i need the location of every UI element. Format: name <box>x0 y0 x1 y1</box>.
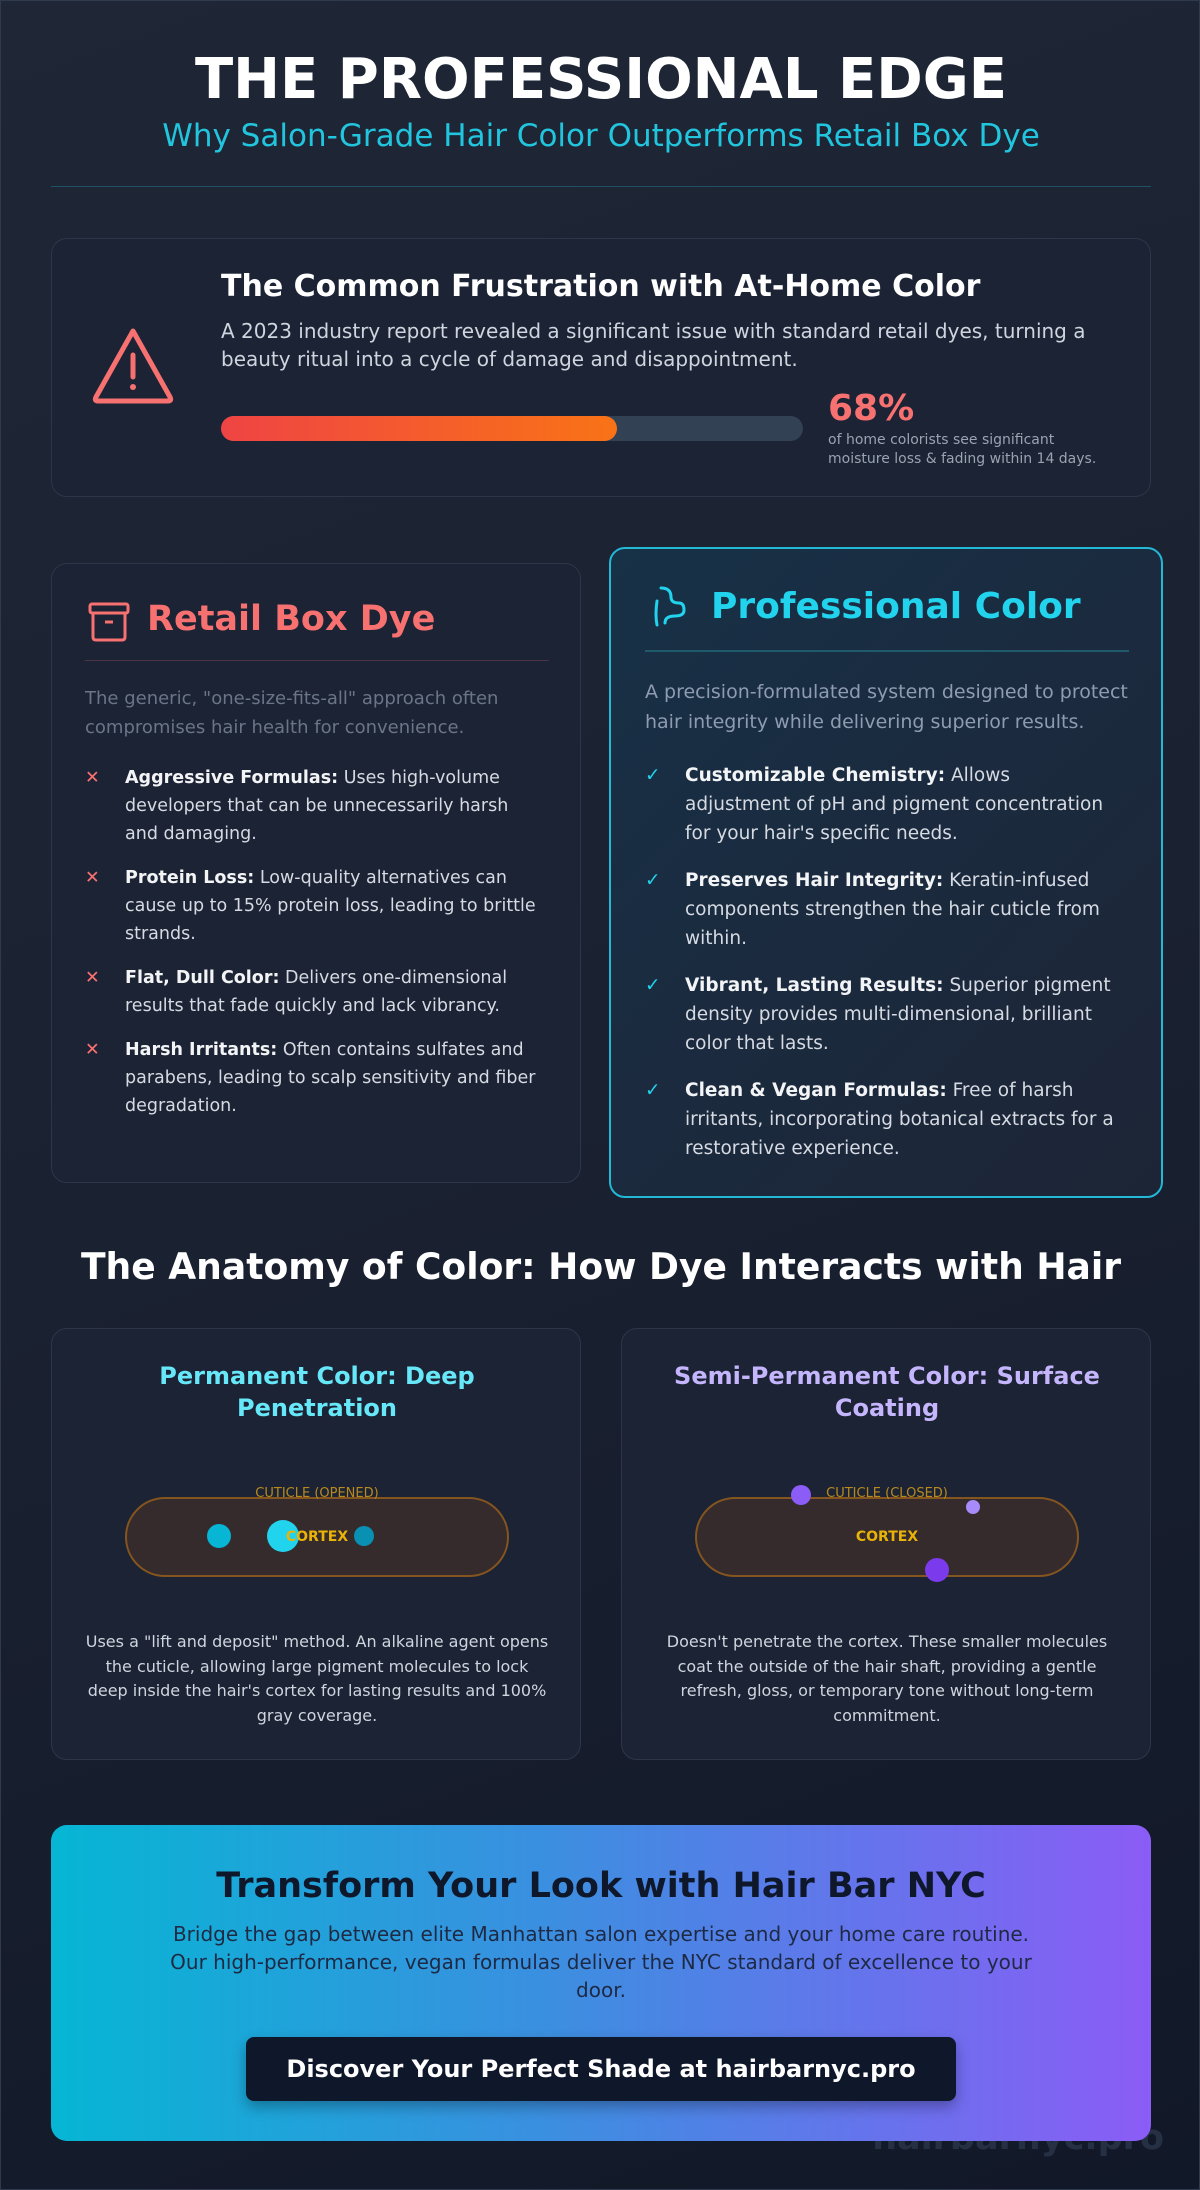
heading: anatomy: The Anatomy of Color: How Dye Interacts with Hair <box>81 1246 1121 1288</box>
item: customizable chemistry: adjustment of pH and pigment concentration for your hair's specific needs. <box>685 794 1103 844</box>
heading: Coating <box>835 1394 939 1422</box>
item: flat dull color: ✕ <box>85 968 100 988</box>
item: clean vegan formulas: Clean & Vegan Formulas: Free of harsh irritants, incorporating botanical extracts for a restorative experience. <box>685 1080 1114 1159</box>
bar chart: 68% <box>221 416 803 441</box>
body text: the cuticle, allowing large pigment molecules to lock <box>106 1656 528 1676</box>
heading: Professional Color <box>711 586 1081 627</box>
item: flat dull color: Flat, Dull Color: Delivers one-dimensional results that fade quickly and lack vibrancy. <box>125 968 507 1016</box>
heading: Semi-Permanent Color: Surface <box>674 1362 1100 1390</box>
body text: Uses a "lift and deposit" method. An alkaline agent opens <box>86 1632 548 1651</box>
body text: Doesn't penetrate the cortex. These smaller molecules <box>667 1632 1107 1651</box>
body text: A 2023 industry report revealed a significant issue with standard retail dyes, turning a beauty ritual into a cycle of damage and disappointment. <box>221 319 1085 371</box>
button <box>246 2037 956 2101</box>
diagram: hair shaft opened: CORTEX <box>286 1529 348 1545</box>
item: preserves hair integrity: ✓ <box>645 870 661 891</box>
item: aggressive formulas: Aggressive Formulas: Uses high-volume developers that can be unnecessarily harsh <box>125 768 508 816</box>
body text: deep inside the hair's cortex for lasting results and 100% <box>88 1681 546 1700</box>
icon: warning <box>92 328 174 404</box>
stat: 68%: of home colorists see significant <box>828 432 1054 448</box>
diagram: hair shaft closed: CORTEX <box>856 1529 918 1545</box>
item: vibrant lasting results: ✓ <box>645 975 661 996</box>
item: aggressive formulas: ✕ <box>85 768 100 788</box>
title: THE PROFESSIONAL EDGE <box>195 47 1007 112</box>
item: aggressive formulas: and damaging. <box>125 824 257 844</box>
stat: 68%: 68% <box>828 388 914 429</box>
item: harsh irritants: Harsh Irritants: Often contains sulfates and parabens, leading to scalp sensitivity and fiber degradation. <box>125 1040 535 1116</box>
heading: Transform Your Look with Hair Bar NYC <box>216 1866 986 1906</box>
intro text: The generic, "one-size-fits-all" approach often compromises hair health for convenience. <box>85 688 498 738</box>
panel: permanent color <box>51 1328 581 1760</box>
item: customizable chemistry: ✓ <box>645 765 661 786</box>
heading <box>159 1362 475 1422</box>
item: protein loss: Protein Loss: Low-quality alternatives can cause up to 15% protein loss, leading to brittle strands. <box>125 868 536 944</box>
heading: Permanent Color: Deep <box>159 1362 475 1390</box>
heading: Retail Box Dye <box>147 599 435 639</box>
body text: coat the outside of the hair shaft, providing a gentle <box>678 1656 1096 1676</box>
panel: semi-permanent color <box>621 1328 1151 1760</box>
heading: The Common Frustration with At-Home Color <box>221 269 980 304</box>
item: preserves hair integrity: Preserves Hair Integrity: Keratin-infused components strengthen the hair cuticle from within. <box>685 870 1100 949</box>
body text: refresh, gloss, or temporary tone without long-term <box>681 1681 1093 1700</box>
body text: gray coverage. <box>257 1706 377 1724</box>
intro text: A precision-formulated system designed to protect hair integrity while delivering superior results. <box>645 681 1128 733</box>
watermark: hairbarnyc.pro <box>872 2118 1164 2158</box>
list: drawbacks <box>85 768 536 1116</box>
button: Discover Your Perfect Shade at hairbarnyc.pro <box>286 2055 916 2083</box>
diagram: hair shaft closed <box>695 1485 1079 1582</box>
panel: retail box dye <box>51 563 581 1183</box>
item: aggressive formulas <box>85 768 508 844</box>
subtitle: Why Salon-Grade Hair Color Outperforms Retail Box Dye <box>162 118 1040 154</box>
body text <box>86 1632 548 1724</box>
item: harsh irritants: ✕ <box>85 1040 100 1060</box>
body text <box>667 1632 1107 1724</box>
body text <box>170 1922 1032 2002</box>
heading: Penetration <box>237 1394 397 1422</box>
diagram: hair shaft closed: CUTICLE (CLOSED) <box>826 1486 948 1501</box>
panel: professional color <box>609 547 1163 1198</box>
heading <box>674 1362 1100 1422</box>
diagram: hair shaft opened <box>125 1486 509 1577</box>
icon: box <box>88 602 130 642</box>
icon: hair <box>654 586 686 626</box>
list: benefits <box>645 765 1114 1159</box>
body text: Bridge the gap between elite Manhattan salon expertise and your home care routine. <box>173 1922 1029 1946</box>
panel: frustration <box>51 238 1151 497</box>
item: protein loss: ✕ <box>85 868 100 888</box>
panel: call to action <box>51 1825 1151 2141</box>
item: vibrant lasting results: Vibrant, Lasting Results: Superior pigment density provides multi-dimensional, brilliant color that lasts. <box>685 975 1111 1054</box>
diagram: hair shaft opened: CUTICLE (OPENED) <box>255 1486 379 1501</box>
stat: 68%: moisture loss & fading within 14 days. <box>828 451 1096 467</box>
stat: 68% <box>828 388 1096 467</box>
item: clean vegan formulas: ✓ <box>645 1080 661 1101</box>
item: customizable chemistry <box>645 765 1103 844</box>
item: customizable chemistry: Customizable Chemistry: Allows <box>685 765 1010 786</box>
body text: commitment. <box>833 1706 941 1724</box>
body text: Our high-performance, vegan formulas deliver the NYC standard of excellence to your door. <box>170 1950 1032 2002</box>
